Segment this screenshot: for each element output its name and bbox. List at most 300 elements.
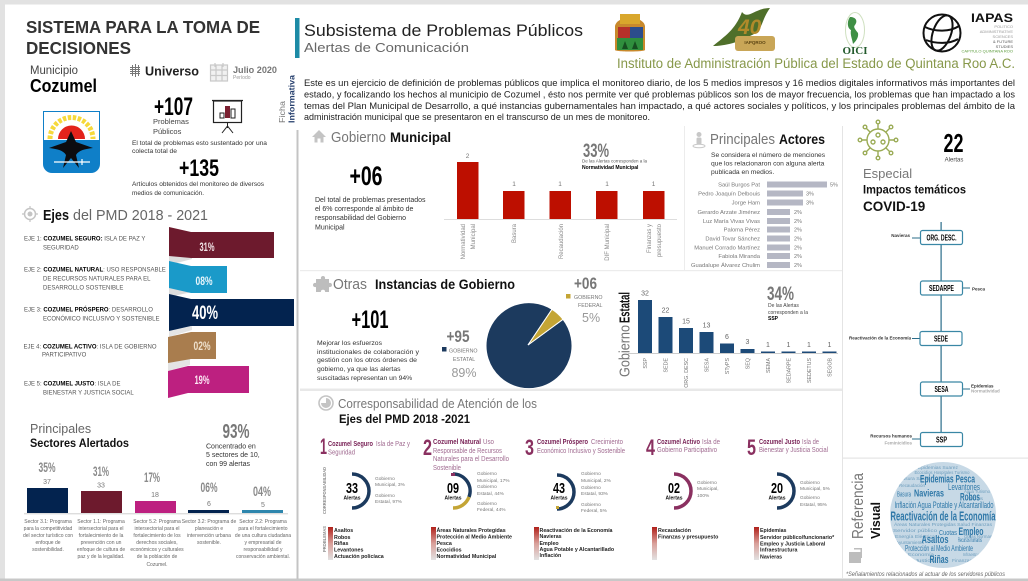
icon: person xyxy=(693,132,705,148)
column 3: cozumel prospero: 43 xyxy=(553,480,565,497)
logo: IAPAS: CAPITULO QUINTANA ROO xyxy=(962,48,1013,54)
bar chart: 32 xyxy=(641,290,649,298)
intro paragraph: administración municipal que se presentaron en el transcurso de un mes de monitoreo. xyxy=(304,112,650,122)
bar chart: 18 xyxy=(151,492,159,499)
column 2: cozumel natural: Gobierno xyxy=(477,471,497,477)
timeline: SEDE xyxy=(934,334,948,344)
description: Municipal xyxy=(315,224,345,232)
header: subsistema xyxy=(295,18,583,58)
column 3: cozumel prospero: Agua Potable y Alcantarillado xyxy=(540,547,615,553)
heading: del PMD 2018 - 2021 xyxy=(73,208,208,224)
column 5: cozumel justo: Cozumel Justo xyxy=(759,437,800,446)
word cloud: Ayuntamiento xyxy=(896,540,925,545)
bar chart: 2 xyxy=(466,153,470,160)
column 5: cozumel justo: Gobierno xyxy=(800,480,820,486)
stat: 135 articles xyxy=(132,155,264,197)
logo: OICI xyxy=(842,12,868,57)
column 2: cozumel natural: Federal, 44% xyxy=(477,507,506,513)
column 2: cozumel natural: Gobierno xyxy=(477,501,497,507)
bar chart: 2% xyxy=(794,236,802,242)
column 2: cozumel natural: Ecocidios xyxy=(436,548,462,554)
period: Período xyxy=(233,75,251,81)
intro paragraph: Este es un ejercicio de definición de problemas públicos que implica el monitoreo diario, de los 5 medios impresos y 16 medios digitales informativos más importantes del xyxy=(304,78,1015,88)
word cloud: Servidor público xyxy=(893,528,938,533)
bar chart: Normatividad xyxy=(461,224,467,259)
bar chart: 06% xyxy=(200,479,218,495)
heading: Visual xyxy=(868,502,883,539)
municipality name: Municipio xyxy=(30,65,78,77)
bar chart xyxy=(691,182,838,269)
column 5: cozumel justo: Infraestructura xyxy=(760,548,797,554)
logo: IAPAS: STUDIES xyxy=(996,44,1013,49)
side labels: PROBLEMAS xyxy=(322,526,327,552)
bar chart: Pedro Joaquín Delbouis xyxy=(698,192,760,198)
panel: especial covid-19 xyxy=(849,120,1000,446)
callout: 33 percent: De las Alertas corresponden a la xyxy=(582,158,648,164)
heading xyxy=(850,473,883,539)
column 5: cozumel justo: Navieras xyxy=(760,554,782,560)
sector descriptions: Sector 5.2: Programa xyxy=(133,519,181,525)
heading: gobierno estatal: Estatal xyxy=(618,292,634,323)
bar chart xyxy=(444,153,677,261)
bar chart: 04% xyxy=(253,483,271,499)
column 2: cozumel natural: Naturales para el Desarrollo xyxy=(433,456,509,463)
timeline: SEDARPE xyxy=(929,284,954,293)
heading: Instancias de Gobierno xyxy=(375,277,515,292)
description: Mejorar los esfuerzos xyxy=(317,340,383,347)
bar chart: 1 xyxy=(787,342,791,349)
word cloud: Justicia xyxy=(915,558,936,563)
bar chart: 1 xyxy=(605,181,609,188)
callout: 93 percent: Concentrado en xyxy=(206,444,256,450)
column 3: cozumel prospero: Económico Inclusivo y Sostenible xyxy=(537,448,625,455)
bar chart: 22 xyxy=(662,308,669,314)
logo: 40 anniversary: 40 xyxy=(737,16,762,39)
description: institucionales de colaboración y xyxy=(317,349,420,356)
icon: presentation board xyxy=(212,100,243,133)
bar chart: 33 xyxy=(97,482,105,490)
description: que los relacionaron con alguna alerta xyxy=(711,160,825,168)
municipality name: Cozumel xyxy=(30,76,97,96)
sector descriptions: intersectorial para el xyxy=(78,526,124,532)
column 2: cozumel natural: Estatal, 44% xyxy=(477,491,505,497)
bar chart: SESA xyxy=(704,358,710,372)
column 5: cozumel justo: Bienestar y Justicia Social xyxy=(759,447,828,454)
heading: Gobierno xyxy=(331,129,386,146)
eje bars: 02% xyxy=(194,339,211,353)
word cloud: Protección al Medio Ambiente xyxy=(905,544,973,553)
bar chart: 31% xyxy=(93,463,109,479)
heading xyxy=(863,166,966,214)
word cloud: Finanzas xyxy=(952,558,973,563)
word cloud: Áreas Naturales Protegidas Salud Finanzas xyxy=(894,521,993,527)
bar chart: SSP xyxy=(643,358,649,369)
sector descriptions: intersectorial para el xyxy=(134,526,180,532)
description: Del total de problemas presentados xyxy=(315,197,426,204)
side labels xyxy=(322,467,327,552)
bar chart: 35% xyxy=(38,459,56,475)
column 2: cozumel natural: Cozumel Natural xyxy=(433,437,481,446)
timeline: Recursos humanos xyxy=(870,434,912,438)
panel: ejes del PMD xyxy=(22,206,294,398)
column 1: cozumel seguro: Gobierno xyxy=(375,476,395,482)
callout: 33 percent: 33% xyxy=(583,141,609,162)
word cloud: Riñas xyxy=(930,554,948,566)
column 1: cozumel seguro: Robos xyxy=(334,535,351,541)
stat: 107 problems xyxy=(153,93,193,136)
stat: 135 articles: Artículos obtenidos del monitoreo de diversos xyxy=(132,181,264,188)
column 3: cozumel prospero: Gobierno xyxy=(581,485,601,491)
column 2: cozumel natural xyxy=(423,435,512,560)
legend: gobierno federal: 5% xyxy=(582,311,600,325)
label: ficha informativa: Informativa xyxy=(286,75,296,123)
icon: Cozumel coat of arms xyxy=(43,111,100,173)
bar chart: SEDETUS xyxy=(807,358,813,383)
column 2: cozumel natural: Responsable de Recursos xyxy=(433,448,502,455)
bar chart: SEMA xyxy=(766,358,772,373)
bar chart: SEQ xyxy=(746,358,752,369)
heading: Principales xyxy=(30,422,91,436)
text: total of problems: colecta total de xyxy=(132,148,177,155)
intro paragraph: estado, y focalizando los hechos al municipio de Cozumel , ésto nos permite ver qué problemas públicos son los de mayor frecuencia, los problemas que han impactado a los xyxy=(304,90,1015,100)
bar chart: 3 xyxy=(746,339,750,346)
column 5: cozumel justo: 5 xyxy=(747,435,756,460)
institute name: Instituto de Administración Pública del Estado de Quintana Roo A.C. xyxy=(617,56,1015,71)
heading: Referencia xyxy=(850,473,867,539)
column 4: cozumel activo: Municipal, xyxy=(697,486,719,492)
legend: gobierno federal: +06 xyxy=(574,274,597,293)
column 5: cozumel justo: Municipal, 5% xyxy=(800,486,831,492)
stat: 101: +101 xyxy=(352,306,389,334)
header: subsistema: Subsistema de Problemas Públicos xyxy=(304,21,583,40)
logo: IAPAS xyxy=(924,11,1013,54)
eje bars: 08% xyxy=(196,274,213,288)
column 1: cozumel seguro: Isla de Paz y xyxy=(376,441,410,448)
heading: Ejes del PMD 2018 -2021 xyxy=(339,412,470,426)
bar chart: Manuel Corrado Martínez xyxy=(694,246,760,252)
timeline: ORG. DESC. xyxy=(926,234,956,242)
sector descriptions xyxy=(23,519,291,568)
column 5: cozumel justo xyxy=(747,435,835,560)
period xyxy=(210,63,277,81)
eje labels: EJE 5: COZUMEL JUSTO: ISLA DE xyxy=(24,382,120,388)
heading: Municipal xyxy=(390,130,451,145)
bar chart: Saúl Burgos Pat xyxy=(718,182,760,188)
stat: 107 problems: Problemas xyxy=(153,117,189,126)
eje labels: DESARROLLO SOSTENIBLE xyxy=(43,286,123,292)
bar chart: Jorge Ham xyxy=(732,200,760,206)
title xyxy=(26,17,260,58)
description: publicada en medios. xyxy=(711,169,774,176)
label: ficha informativa: Ficha xyxy=(277,101,287,123)
header: subsistema: Alertas de Comunicación xyxy=(304,40,469,55)
eje labels: EJE 4: COZUMEL ACTIVO: ISLA DE GOBIERNO xyxy=(24,344,157,350)
eje labels: ECONÓMICO INCLUSIVO Y SOSTENIBLE xyxy=(43,316,159,322)
panel: sectores alertados xyxy=(23,421,291,568)
heading: Ejes xyxy=(43,208,69,224)
column 1: cozumel seguro: Cozumel Seguro xyxy=(328,439,373,448)
callout: 93 percent: 5 sectores de 10, xyxy=(206,452,260,459)
callout: 93 percent xyxy=(206,421,260,468)
column 3: cozumel prospero: Gobierno xyxy=(581,502,601,508)
sector descriptions: conservación ambiental. xyxy=(236,554,290,560)
sector descriptions: y empresarial de xyxy=(245,540,282,546)
stat: 135 articles: medios de comunicación. xyxy=(132,190,204,197)
timeline: Epidemias xyxy=(971,384,994,388)
icon: grid xyxy=(130,64,140,77)
pie chart xyxy=(486,303,572,389)
heading xyxy=(710,131,825,148)
column 5: cozumel justo: Alertas xyxy=(769,496,786,502)
column 1: cozumel seguro: Riñas xyxy=(334,541,348,547)
column 4: cozumel activo: 02 xyxy=(668,480,680,497)
heading: Principales xyxy=(710,131,775,148)
word cloud: Epidemias Suarez xyxy=(918,465,959,470)
logo: IAPAS: ADMINISTRATIVE xyxy=(980,29,1013,34)
icon: virus xyxy=(858,120,898,160)
stat: 22 alerts: 22 xyxy=(944,128,964,158)
description: Se considera el número de menciones xyxy=(711,152,826,159)
eje bars: 31% xyxy=(200,240,215,254)
word cloud: Infraestructura xyxy=(963,552,987,557)
heading: Corresponsabilidad de Atención de los xyxy=(338,396,537,411)
description: responsabilidad del Gobierno xyxy=(315,215,406,222)
word cloud: Levantones xyxy=(948,482,980,492)
callout: 33 percent xyxy=(582,141,648,171)
icon: calendar xyxy=(210,63,228,81)
column 3: cozumel prospero: Empleo xyxy=(540,541,559,547)
column 5: cozumel justo: Servidor público/funcionario* xyxy=(760,535,835,541)
column 1: cozumel seguro: 1 xyxy=(320,434,327,459)
title: DECISIONES xyxy=(26,38,131,58)
stat: 135 articles: +135 xyxy=(179,155,219,182)
heading xyxy=(331,129,451,146)
intro paragraph xyxy=(304,78,1016,122)
icon: house xyxy=(312,130,326,142)
bar chart: SEDE xyxy=(664,358,670,372)
bar chart xyxy=(24,459,288,514)
legend: gobierno federal: FEDERAL xyxy=(578,303,602,309)
callout: 34 percent: SSP xyxy=(768,316,779,322)
column 2: cozumel natural: Alertas xyxy=(445,496,462,502)
column 1: cozumel seguro: Municipal, 3% xyxy=(375,482,406,488)
column 4: cozumel activo: Finanzas y presupuesto xyxy=(658,534,719,540)
logo: 40 anniversary xyxy=(713,8,775,51)
word cloud: Recaudación xyxy=(899,483,925,488)
sector descriptions: derechos sociales, xyxy=(136,540,178,546)
legend: gobierno estatal: 89% xyxy=(451,366,477,380)
bar chart: SEGOB xyxy=(828,358,834,377)
callout: 93 percent: con 99 alertas xyxy=(206,461,250,468)
column 5: cozumel justo: Empleo y Justicia Laboral xyxy=(760,542,826,548)
eje bars: 19% xyxy=(194,373,210,387)
universe heading: Universo xyxy=(145,64,199,78)
heading: Otras xyxy=(333,276,367,293)
column 1: cozumel seguro xyxy=(320,434,410,560)
bar chart: 1 xyxy=(828,342,832,349)
bar chart: 15 xyxy=(682,318,690,326)
bar chart: 2% xyxy=(794,246,802,252)
eje labels: SEGURIDAD xyxy=(43,246,79,252)
bar chart: 2% xyxy=(794,210,802,216)
column 5: cozumel justo: Gobierno xyxy=(800,495,820,501)
sector descriptions: intervención urbana xyxy=(187,533,231,539)
timeline: Reactivación de la Economía xyxy=(849,336,911,340)
bar chart: 2% xyxy=(794,228,802,234)
column 3: cozumel prospero: Estatal, 93% xyxy=(581,491,609,497)
description: el 6% corresponde al ámbito de xyxy=(315,206,414,213)
word cloud: Agua Turismo xyxy=(964,489,990,494)
sector descriptions: del sector turístico con xyxy=(23,533,73,539)
heading xyxy=(333,276,515,293)
word cloud: Epidemias Pesca xyxy=(920,474,976,486)
panel: referencia visual xyxy=(846,462,1005,578)
description xyxy=(317,340,420,382)
timeline: SESA xyxy=(934,385,949,394)
bar chart: SEDARPE xyxy=(786,358,792,383)
word cloud: Navieras xyxy=(914,488,944,500)
sector descriptions: enfoque de xyxy=(35,540,61,546)
bar chart: 17% xyxy=(144,469,160,485)
column 2: cozumel natural: 09 xyxy=(447,480,459,497)
column 3: cozumel prospero: Reactivación de la Economía xyxy=(540,528,613,534)
word cloud: Ecocidios Hospitales Turismo xyxy=(914,470,970,475)
word cloud: Asaltos xyxy=(922,534,948,546)
bar chart: Fabiola Miranda xyxy=(718,254,761,260)
sector descriptions: planeación e xyxy=(195,526,223,532)
column 1: cozumel seguro: Alertas xyxy=(344,496,361,502)
timeline: Normatividad xyxy=(971,388,1000,394)
panel: gobierno municipal xyxy=(312,129,677,261)
sector descriptions: paz y de la legalidad. xyxy=(78,554,124,560)
column 5: cozumel justo: Estatal, 95% xyxy=(800,502,828,508)
eje labels: EJE 1: COZUMEL SEGURO: ISLA DE PAZ Y xyxy=(24,236,145,242)
column 4: cozumel activo xyxy=(646,435,720,560)
sector descriptions: de una cultura ciudadana xyxy=(235,533,291,539)
column 1: cozumel seguro: 33 xyxy=(346,480,358,497)
bar chart: 6 xyxy=(207,501,211,508)
column 4: cozumel activo: Gobierno Participativo xyxy=(657,447,717,454)
sector descriptions: Cozumel. xyxy=(146,562,168,568)
label: ficha informativa xyxy=(277,75,296,123)
bar chart: Guadalupe Álvarez Chulim xyxy=(691,262,760,269)
sector descriptions: para el fortalecimiento xyxy=(238,526,288,532)
heading: gobierno estatal: Gobierno xyxy=(618,325,634,377)
intro paragraph: temas del Plan Municipal de Desarrollo, a qué instancias gubernamentales han impactado, a qué actores sociales y políticos, y los principales problemas del ámbito de la xyxy=(304,101,1016,111)
description: suscitadas representan un 94% xyxy=(317,375,412,382)
bar chart: 5% xyxy=(830,182,838,188)
bar chart: 6 xyxy=(725,334,729,341)
word cloud: Empleo xyxy=(958,526,984,538)
bar chart: 1 xyxy=(558,181,562,188)
logo: IAPAS: POLITICO xyxy=(994,24,1013,29)
column 3: cozumel prospero: Navieras xyxy=(540,534,562,540)
panel: otras instancias de gobierno xyxy=(313,274,838,389)
callout: 34 percent: corresponden a la xyxy=(768,310,808,316)
bar chart: 3% xyxy=(806,192,814,198)
logo: 40 anniversary: IAPQROO xyxy=(744,40,766,45)
bar chart: 1 xyxy=(807,342,811,349)
title: SISTEMA PARA LA TOMA DE xyxy=(26,17,260,37)
eje labels: DE RECURSOS NATURALES PARA EL xyxy=(43,276,151,282)
sector descriptions: de la población de xyxy=(137,554,178,560)
heading: Impactos temáticos xyxy=(863,182,966,196)
description xyxy=(711,152,826,176)
word cloud: Economía xyxy=(908,552,935,557)
eje labels: PARTICIPATIVO xyxy=(42,352,87,358)
bar chart: Recaudación xyxy=(559,224,565,259)
word cloud: Basura Salud xyxy=(899,476,930,481)
sector descriptions: Sector 1.1: Programa xyxy=(77,519,125,525)
column 3: cozumel prospero: 3 xyxy=(525,435,534,460)
bar chart: 2% xyxy=(794,219,802,225)
bar chart: STyPS xyxy=(725,358,731,374)
word cloud: Cuotas xyxy=(939,530,957,537)
column 2: cozumel natural: Gobierno xyxy=(477,484,497,490)
sector descriptions: sostenible. xyxy=(197,540,221,546)
timeline: Pesca xyxy=(972,286,986,292)
sector descriptions: prevención con un xyxy=(81,540,122,546)
column 4: cozumel activo: Alertas xyxy=(666,496,683,502)
column 3: cozumel prospero: Municipal, 2% xyxy=(581,478,612,484)
column 4: cozumel activo: Gobierno xyxy=(697,480,717,486)
column 4: cozumel activo: 100% xyxy=(697,493,710,499)
column 5: cozumel justo: Epidemias xyxy=(760,528,787,534)
column 1: cozumel seguro: Levantones xyxy=(334,548,363,554)
eje labels: BIENESTAR Y JUSTICIA SOCIAL xyxy=(43,390,134,396)
column 3: cozumel prospero: Inflación xyxy=(540,553,561,559)
legend: gobierno federal: GOBIERNO xyxy=(574,295,603,301)
municipality name xyxy=(30,65,97,96)
column 4: cozumel activo: 4 xyxy=(646,435,656,460)
column 2: cozumel natural: Normatividad Municipal xyxy=(436,554,497,560)
text: total of problems xyxy=(132,140,267,155)
column 3: cozumel prospero: Federal, 5% xyxy=(581,508,608,514)
text: total of problems: El total de problemas esto sustentado por una xyxy=(132,140,267,147)
period: Julio 2020 xyxy=(233,65,277,75)
word cloud: Obras Normas xyxy=(964,534,993,539)
word cloud: Energía Eléctrica xyxy=(895,534,936,539)
column 5: cozumel justo: Isla de xyxy=(802,439,819,446)
legend: gobierno estatal xyxy=(442,327,478,380)
bar chart: 1 xyxy=(766,342,770,349)
bar chart: 13 xyxy=(703,322,710,330)
bar chart: David Tovar Sánchez xyxy=(705,236,760,242)
sector descriptions: Sector 3.1: Programa xyxy=(24,519,72,525)
bar chart: 37 xyxy=(43,479,51,486)
sector descriptions: fortalecimiento de los xyxy=(133,533,181,539)
stat: 06: +06 xyxy=(350,161,382,191)
column 2: cozumel natural: Municipal, 17% xyxy=(477,478,510,484)
sector descriptions: Sector 2.2: Programa xyxy=(239,519,287,525)
column 3: cozumel prospero: Gobierno xyxy=(581,471,601,477)
stat: 22 alerts: Alertas xyxy=(945,158,963,164)
bar chart: Paloma Pérez xyxy=(724,228,760,234)
bar chart: Gerardo Arzate Jiménez xyxy=(697,210,760,216)
callout: 34 percent xyxy=(767,284,808,322)
callout: 34 percent: De las Alertas xyxy=(768,303,799,309)
word cloud xyxy=(890,462,996,568)
bar chart: presupuesto xyxy=(657,223,663,257)
bar chart: ORG. DESC xyxy=(684,358,690,388)
heading: Sectores Alertados xyxy=(30,438,129,450)
bar chart: Finanzas y xyxy=(647,224,653,253)
column 4: cozumel activo: Cozumel Activo xyxy=(657,437,700,446)
eje labels: EJE 3: COZUMEL PRÓSPERO: DESARROLLO xyxy=(24,306,153,314)
logo: OICI: OICI xyxy=(842,45,868,57)
logo: IAPAS: & FUTURE xyxy=(993,39,1013,44)
sector descriptions: fortalecimiento de la xyxy=(79,533,124,539)
